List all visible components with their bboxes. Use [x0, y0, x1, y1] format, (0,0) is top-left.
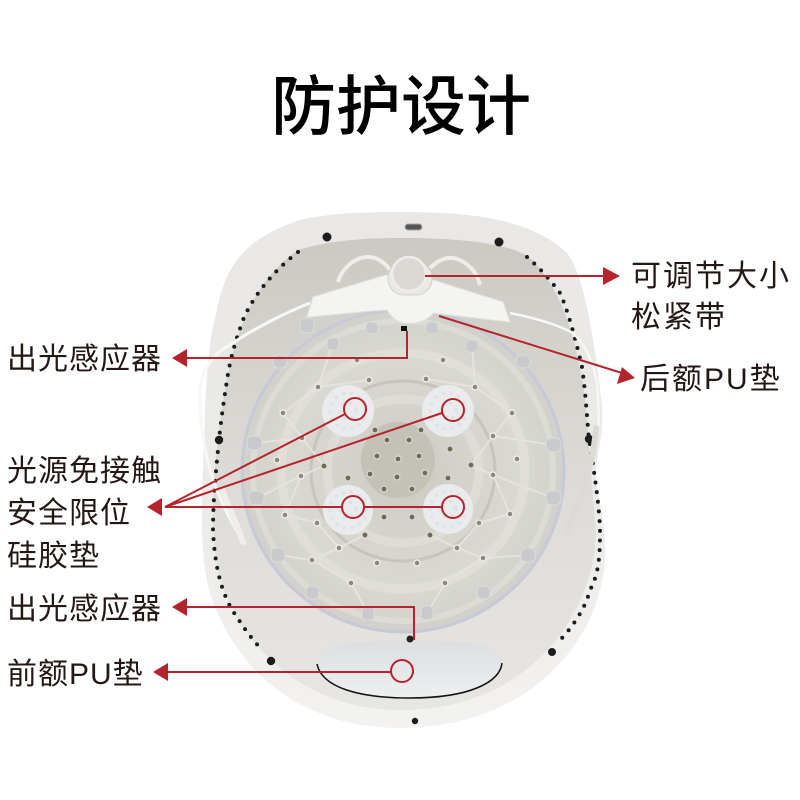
inner floor: [213, 238, 596, 710]
callout: light sensor bottom: [187, 607, 414, 640]
callout: light sensor top: [187, 331, 407, 358]
adjustment knob: [388, 257, 432, 295]
dotted vent right: [527, 257, 600, 640]
callout: back PU pad: [439, 316, 622, 373]
helmet device: [200, 212, 605, 728]
label: light sensor top: 出光感应器: [7, 343, 162, 376]
title: 防护设计: [271, 70, 531, 143]
outer shell: [202, 212, 605, 728]
callout: front PU pad: [168, 660, 413, 682]
center LEDs: [321, 427, 474, 538]
screw holes: [215, 232, 593, 724]
transparent dome: [242, 310, 564, 632]
label: front PU pad: 前额PU垫: [7, 658, 144, 691]
label: adjustable strap: 松紧带: [631, 301, 727, 334]
sensor top: [401, 326, 407, 331]
label: adjustable strap: 可调节大小: [631, 260, 791, 293]
label: silicone pad: 硅胶垫: [7, 540, 100, 573]
web spokes: [255, 343, 553, 613]
front PU pad: [317, 640, 502, 698]
LEDs: [274, 357, 520, 586]
arrowheads: [147, 267, 635, 681]
callout: silicone pads: [165, 398, 464, 518]
label: silicone pad: 光源免接触: [7, 455, 162, 488]
dotted vent left: [213, 252, 298, 650]
label: silicone pad: [7, 455, 162, 573]
sensor bottom: [406, 636, 414, 642]
outer LED housings: [247, 318, 561, 620]
strap left: [200, 303, 310, 542]
strap right: [510, 313, 599, 532]
strap loops: [338, 257, 480, 285]
label: adjustable strap: [631, 260, 791, 334]
back head band: [307, 275, 510, 323]
label: light sensor bottom: 出光感应器: [7, 593, 162, 626]
silicone pads: [322, 385, 474, 535]
label: silicone pad: 安全限位: [7, 497, 131, 530]
callout: knob: [425, 275, 604, 277]
label: back PU pad: 后额PU垫: [640, 363, 782, 396]
usb port: [405, 224, 422, 230]
